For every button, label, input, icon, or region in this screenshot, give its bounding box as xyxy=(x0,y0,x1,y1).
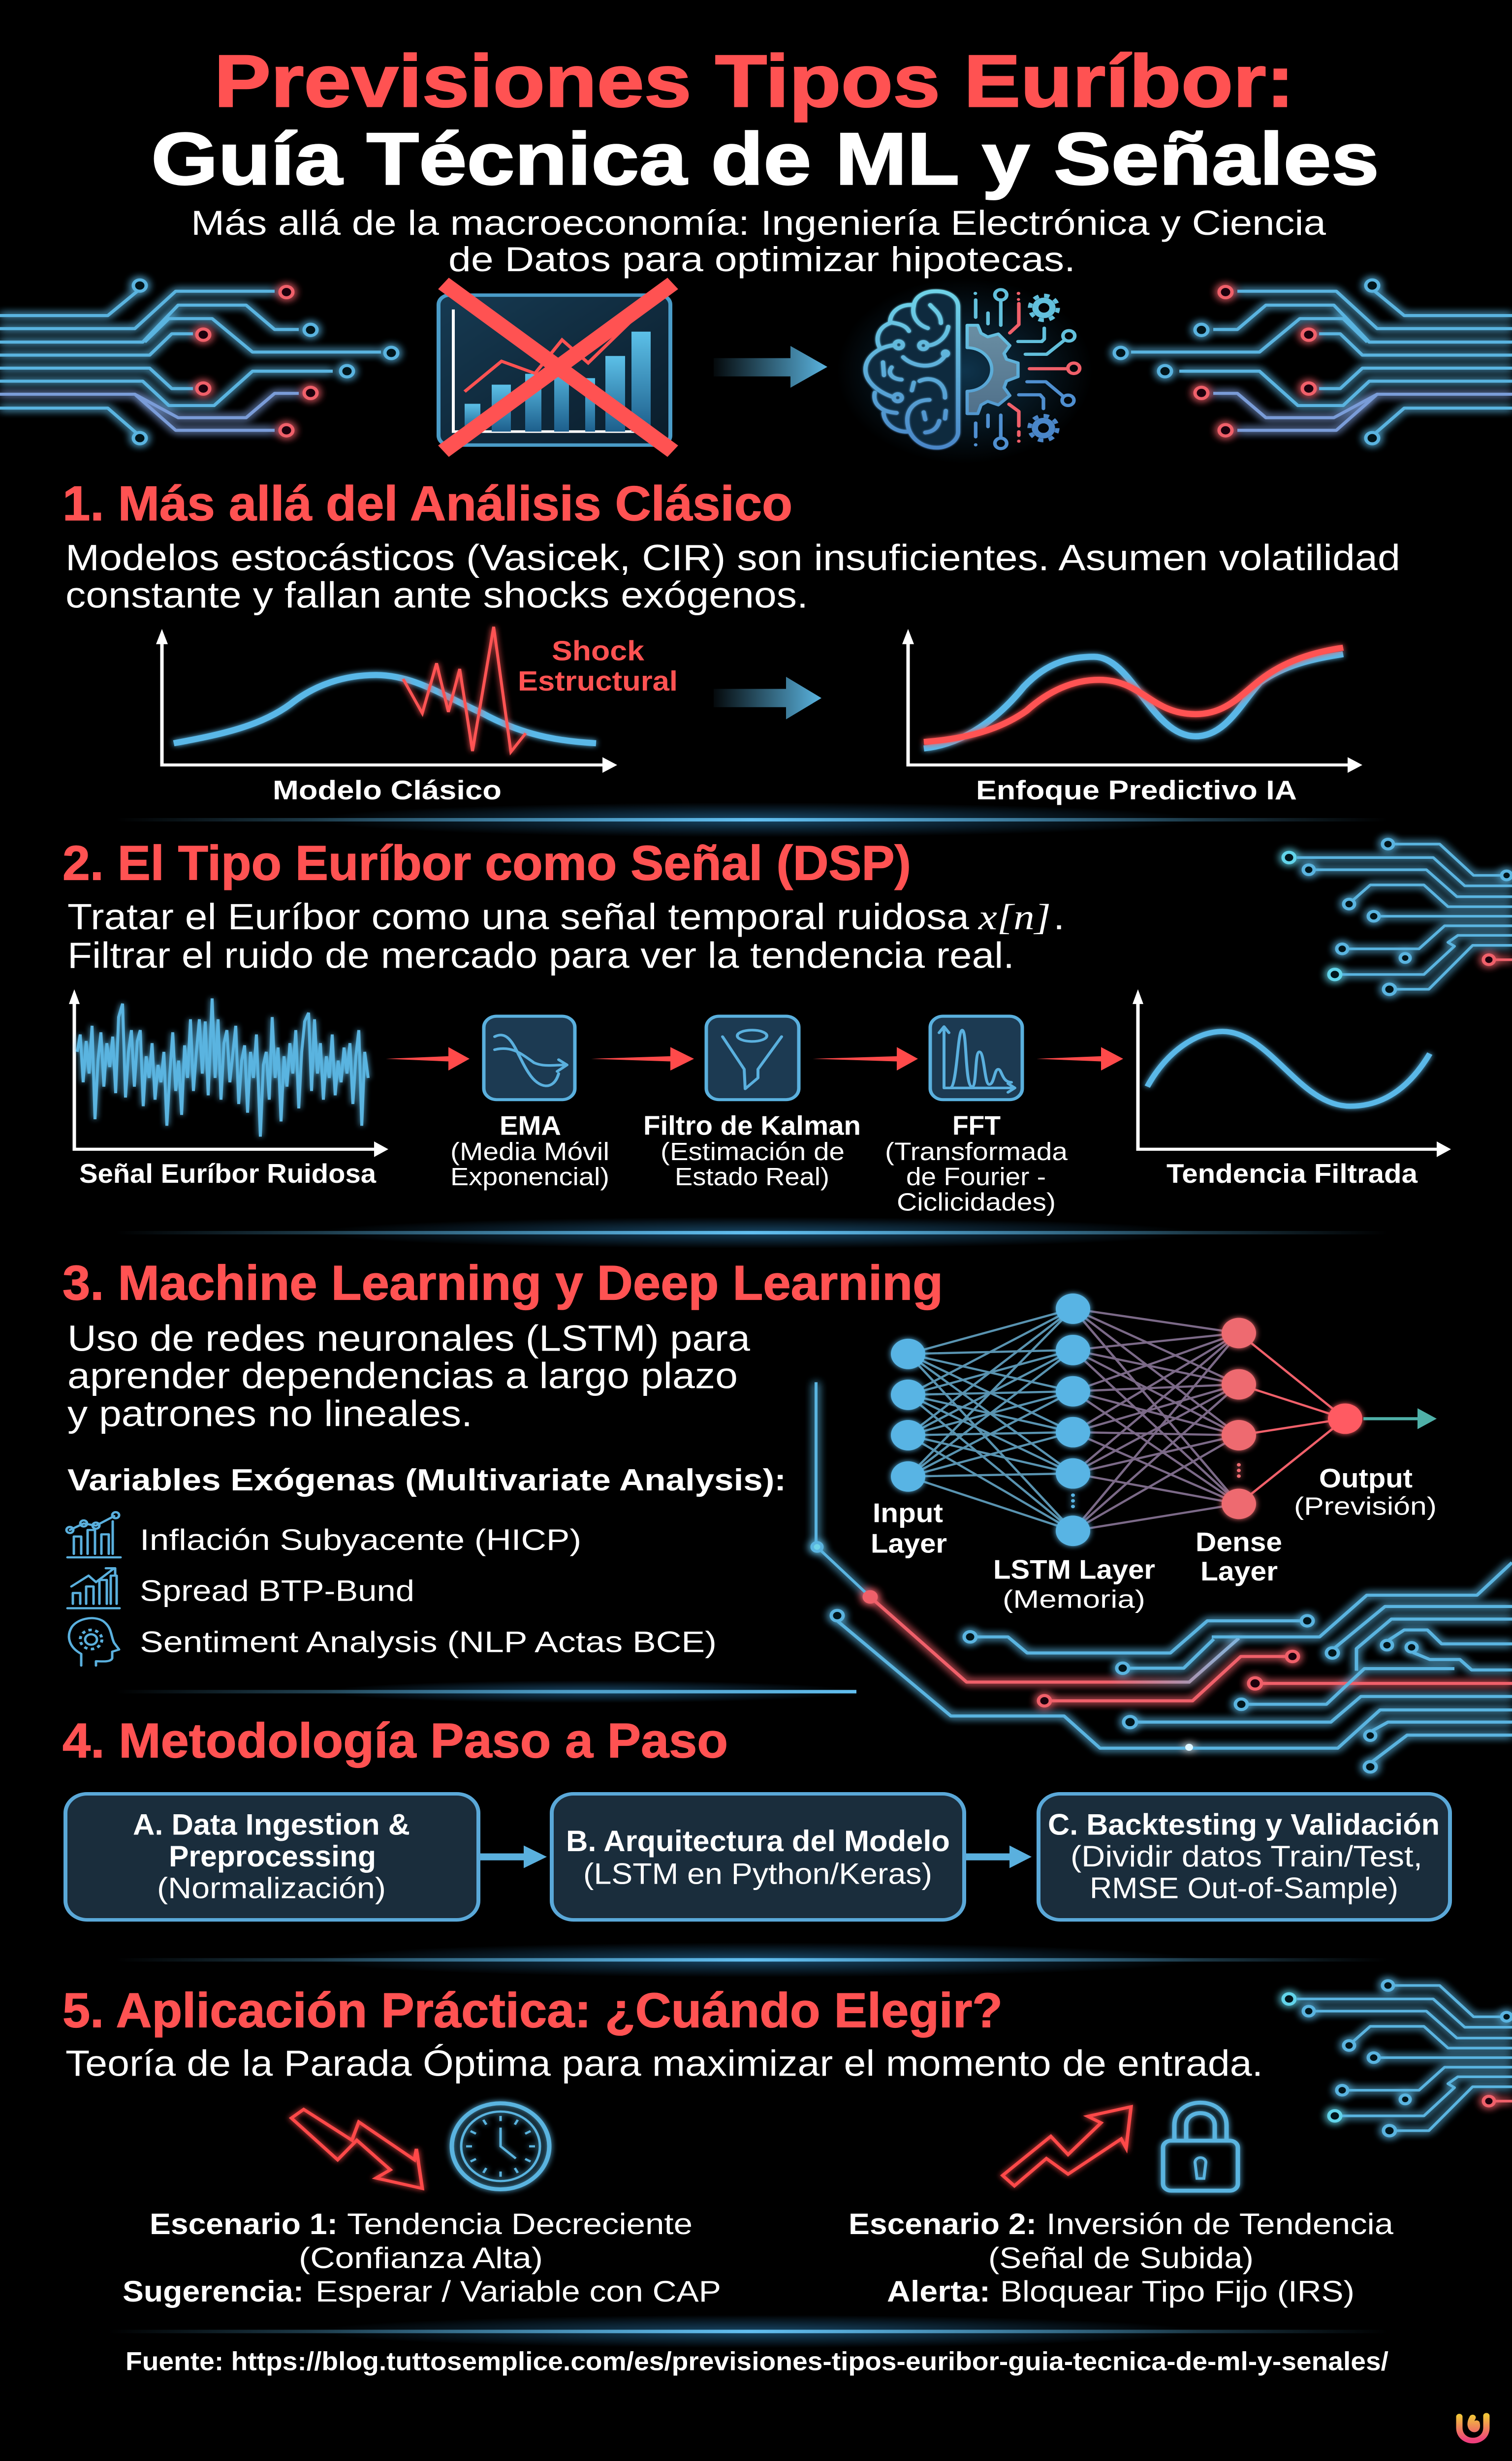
label: input layer: Layer xyxy=(871,1529,947,1559)
label: dense layer xyxy=(1196,1527,1282,1586)
chart: filtered trend xyxy=(1133,989,1451,1157)
subtitle: Más allá de la macroeconomía: Ingeniería Electrónica y Ciencia xyxy=(191,203,1326,242)
label: EMA: EMA xyxy=(500,1111,561,1141)
arrow xyxy=(714,346,827,388)
chart: noisy signal xyxy=(69,989,388,1157)
circuit section 2 xyxy=(1283,839,1512,994)
heading 1: 1. Más allá del Análisis Clásico xyxy=(63,476,792,531)
icon: head with gear xyxy=(69,1618,119,1666)
icon: falling arrow xyxy=(291,2110,422,2188)
arrow 1 xyxy=(714,677,821,719)
circuit section 5 xyxy=(1283,1981,1512,2136)
icon: EMA xyxy=(484,1016,575,1100)
title: Guía Técnica de ML y Señales xyxy=(151,118,1379,200)
scenario 1 text xyxy=(123,2208,721,2308)
variable 2 xyxy=(67,1568,414,1608)
scenario 2 text: Escenario 2: xyxy=(849,2208,1037,2240)
shock label: Shock xyxy=(552,635,644,666)
label: Kalman: Estado Real) xyxy=(675,1162,829,1191)
box B: (LSTM en Python/Keras) xyxy=(583,1857,932,1890)
section 3 xyxy=(63,1256,1437,1666)
icon: funnel xyxy=(706,1016,799,1100)
label: enfoque predictivo: Enfoque Predictivo IA xyxy=(976,775,1297,805)
label: EMA: Exponencial) xyxy=(450,1162,609,1191)
chart: predictive AI xyxy=(902,629,1362,773)
label: Kalman: (Estimación de xyxy=(661,1137,845,1166)
box A xyxy=(65,1794,478,1920)
icon: clock xyxy=(452,2103,549,2189)
shock label: Estructural xyxy=(518,665,678,696)
box C: C. Backtesting y Validación xyxy=(1048,1808,1440,1841)
scenario 1 text: (Confianza Alta) xyxy=(299,2241,543,2274)
shock label xyxy=(518,635,678,696)
brain gear icon xyxy=(837,278,1093,464)
circuit left xyxy=(0,280,398,444)
variable 1: Inflación Subyacente (HICP) xyxy=(140,1523,581,1556)
variables heading: Variables Exógenas (Multivariate Analysis): xyxy=(67,1463,786,1497)
label: Kalman: Filtro de Kalman xyxy=(643,1111,861,1141)
chart: classic model xyxy=(156,627,678,773)
label: LSTM layer: (Memoria) xyxy=(1003,1585,1145,1613)
scenario 1 text: Escenario 1: xyxy=(150,2208,338,2240)
label: FFT: de Fourier - xyxy=(906,1162,1046,1191)
variable 3 xyxy=(69,1618,717,1666)
label: modelo clasico: Modelo Clásico xyxy=(273,775,502,805)
box A: A. Data Ingestion & xyxy=(133,1808,410,1841)
section 5 xyxy=(63,1981,1512,2308)
label: Kalman xyxy=(643,1111,861,1191)
box C xyxy=(1039,1794,1450,1920)
crossed out chart icon xyxy=(439,284,673,451)
body 5: Teoría de la Parada Óptima para maximizar el momento de entrada. xyxy=(65,2043,1263,2084)
scenario 2 text: Bloquear Tipo Fijo (IRS) xyxy=(1000,2275,1354,2308)
heading 5: 5. Aplicación Práctica: ¿Cuándo Elegir? xyxy=(63,1983,1003,2038)
box C: RMSE Out-of-Sample) xyxy=(1090,1871,1398,1905)
heading 4: 4. Metodología Paso a Paso xyxy=(63,1713,728,1768)
body 2 xyxy=(67,896,1065,976)
variable 1 xyxy=(66,1512,581,1557)
section 2 xyxy=(63,835,1512,1216)
box A: Preprocessing xyxy=(169,1840,376,1873)
body 3: aprender dependencias a largo plazo xyxy=(67,1355,738,1396)
scenario 2 text: (Señal de Subida) xyxy=(988,2241,1254,2274)
scenario 2 text: Alerta: xyxy=(887,2275,990,2308)
label: output xyxy=(1294,1463,1437,1520)
title: Previsiones Tipos Euríbor: xyxy=(214,40,1294,122)
icon: spread xyxy=(67,1568,120,1608)
arrow B to C xyxy=(966,1846,1032,1868)
label: EMA: (Media Móvil xyxy=(450,1137,609,1166)
body 3: y patrones no lineales. xyxy=(67,1393,472,1434)
label: tendencia filtrada: Tendencia Filtrada xyxy=(1166,1159,1418,1189)
label: EMA xyxy=(450,1111,609,1191)
label: LSTM layer: LSTM Layer xyxy=(993,1555,1155,1585)
circuit right xyxy=(1114,280,1512,444)
scenario 1 text: Tendencia Decreciente xyxy=(347,2208,693,2240)
body 3: Uso de redes neuronales (LSTM) para xyxy=(67,1318,751,1359)
section 1 xyxy=(63,476,1400,805)
scenario 2 text: Inversión de Tendencia xyxy=(1046,2208,1393,2240)
scenario 2 text xyxy=(849,2208,1393,2308)
heading 3: 3. Machine Learning y Deep Learning xyxy=(63,1256,943,1310)
label: LSTM layer xyxy=(993,1555,1155,1613)
body 3 xyxy=(67,1318,751,1434)
body 2: . xyxy=(1053,896,1065,937)
label: FFT: Ciclicidades) xyxy=(897,1188,1056,1216)
source footer: Fuente: https://blog.tuttosemplice.com/es/previsiones-tipos-euribor-guia-tecnica-de-ml-y-senales/ xyxy=(126,2347,1388,2376)
subtitle: de Datos para optimizar hipotecas. xyxy=(448,240,1075,279)
scenario 1 text: Esperar / Variable con CAP xyxy=(315,2275,721,2308)
variable 3: Sentiment Analysis (NLP Actas BCE) xyxy=(140,1625,717,1659)
label: output: Output xyxy=(1319,1463,1413,1493)
label: output: (Previsión) xyxy=(1294,1492,1437,1520)
arrow A to B xyxy=(480,1846,547,1868)
subtitle xyxy=(191,203,1326,279)
body 2: x[n] xyxy=(978,897,1051,938)
label: FFT: FFT xyxy=(952,1111,1001,1141)
label: FFT: (Transformada xyxy=(885,1137,1068,1166)
icon: lock xyxy=(1163,2103,1238,2191)
scenario 1 text: Sugerencia: xyxy=(123,2275,304,2308)
label: señal ruidosa: Señal Euríbor Ruidosa xyxy=(79,1159,376,1189)
label: input layer xyxy=(871,1498,947,1559)
box B: B. Arquitectura del Modelo xyxy=(566,1825,950,1858)
icon: inflation xyxy=(66,1512,121,1557)
label: dense layer: Layer xyxy=(1200,1556,1278,1586)
red arrows xyxy=(386,1047,1123,1071)
box B xyxy=(552,1794,964,1920)
neural network xyxy=(891,1294,1437,1546)
large circuit xyxy=(812,1382,1512,1772)
body 1: Modelos estocásticos (Vasicek, CIR) son insuficientes. Asumen volatilidad xyxy=(65,537,1400,578)
section 4 xyxy=(63,1713,1450,1920)
label: dense layer: Dense xyxy=(1196,1527,1282,1557)
icon: rising arrow xyxy=(1003,2107,1131,2186)
logo xyxy=(1459,2416,1486,2440)
heading 2: 2. El Tipo Euríbor como Señal (DSP) xyxy=(63,835,911,890)
title xyxy=(151,40,1379,200)
variable 2: Spread BTP-Bund xyxy=(140,1574,414,1607)
body 1 xyxy=(65,537,1400,615)
icon: FFT xyxy=(930,1016,1022,1100)
box A: (Normalización) xyxy=(157,1871,386,1905)
body 1: constante y fallan ante shocks exógenos. xyxy=(65,574,808,615)
body 2: Filtrar el ruido de mercado para ver la tendencia real. xyxy=(67,935,1014,976)
body 2: Tratar el Euríbor como una señal temporal ruidosa xyxy=(67,896,970,937)
label: FFT xyxy=(885,1111,1068,1216)
label: input layer: Input xyxy=(873,1498,943,1528)
box C: (Dividir datos Train/Test, xyxy=(1071,1840,1422,1873)
